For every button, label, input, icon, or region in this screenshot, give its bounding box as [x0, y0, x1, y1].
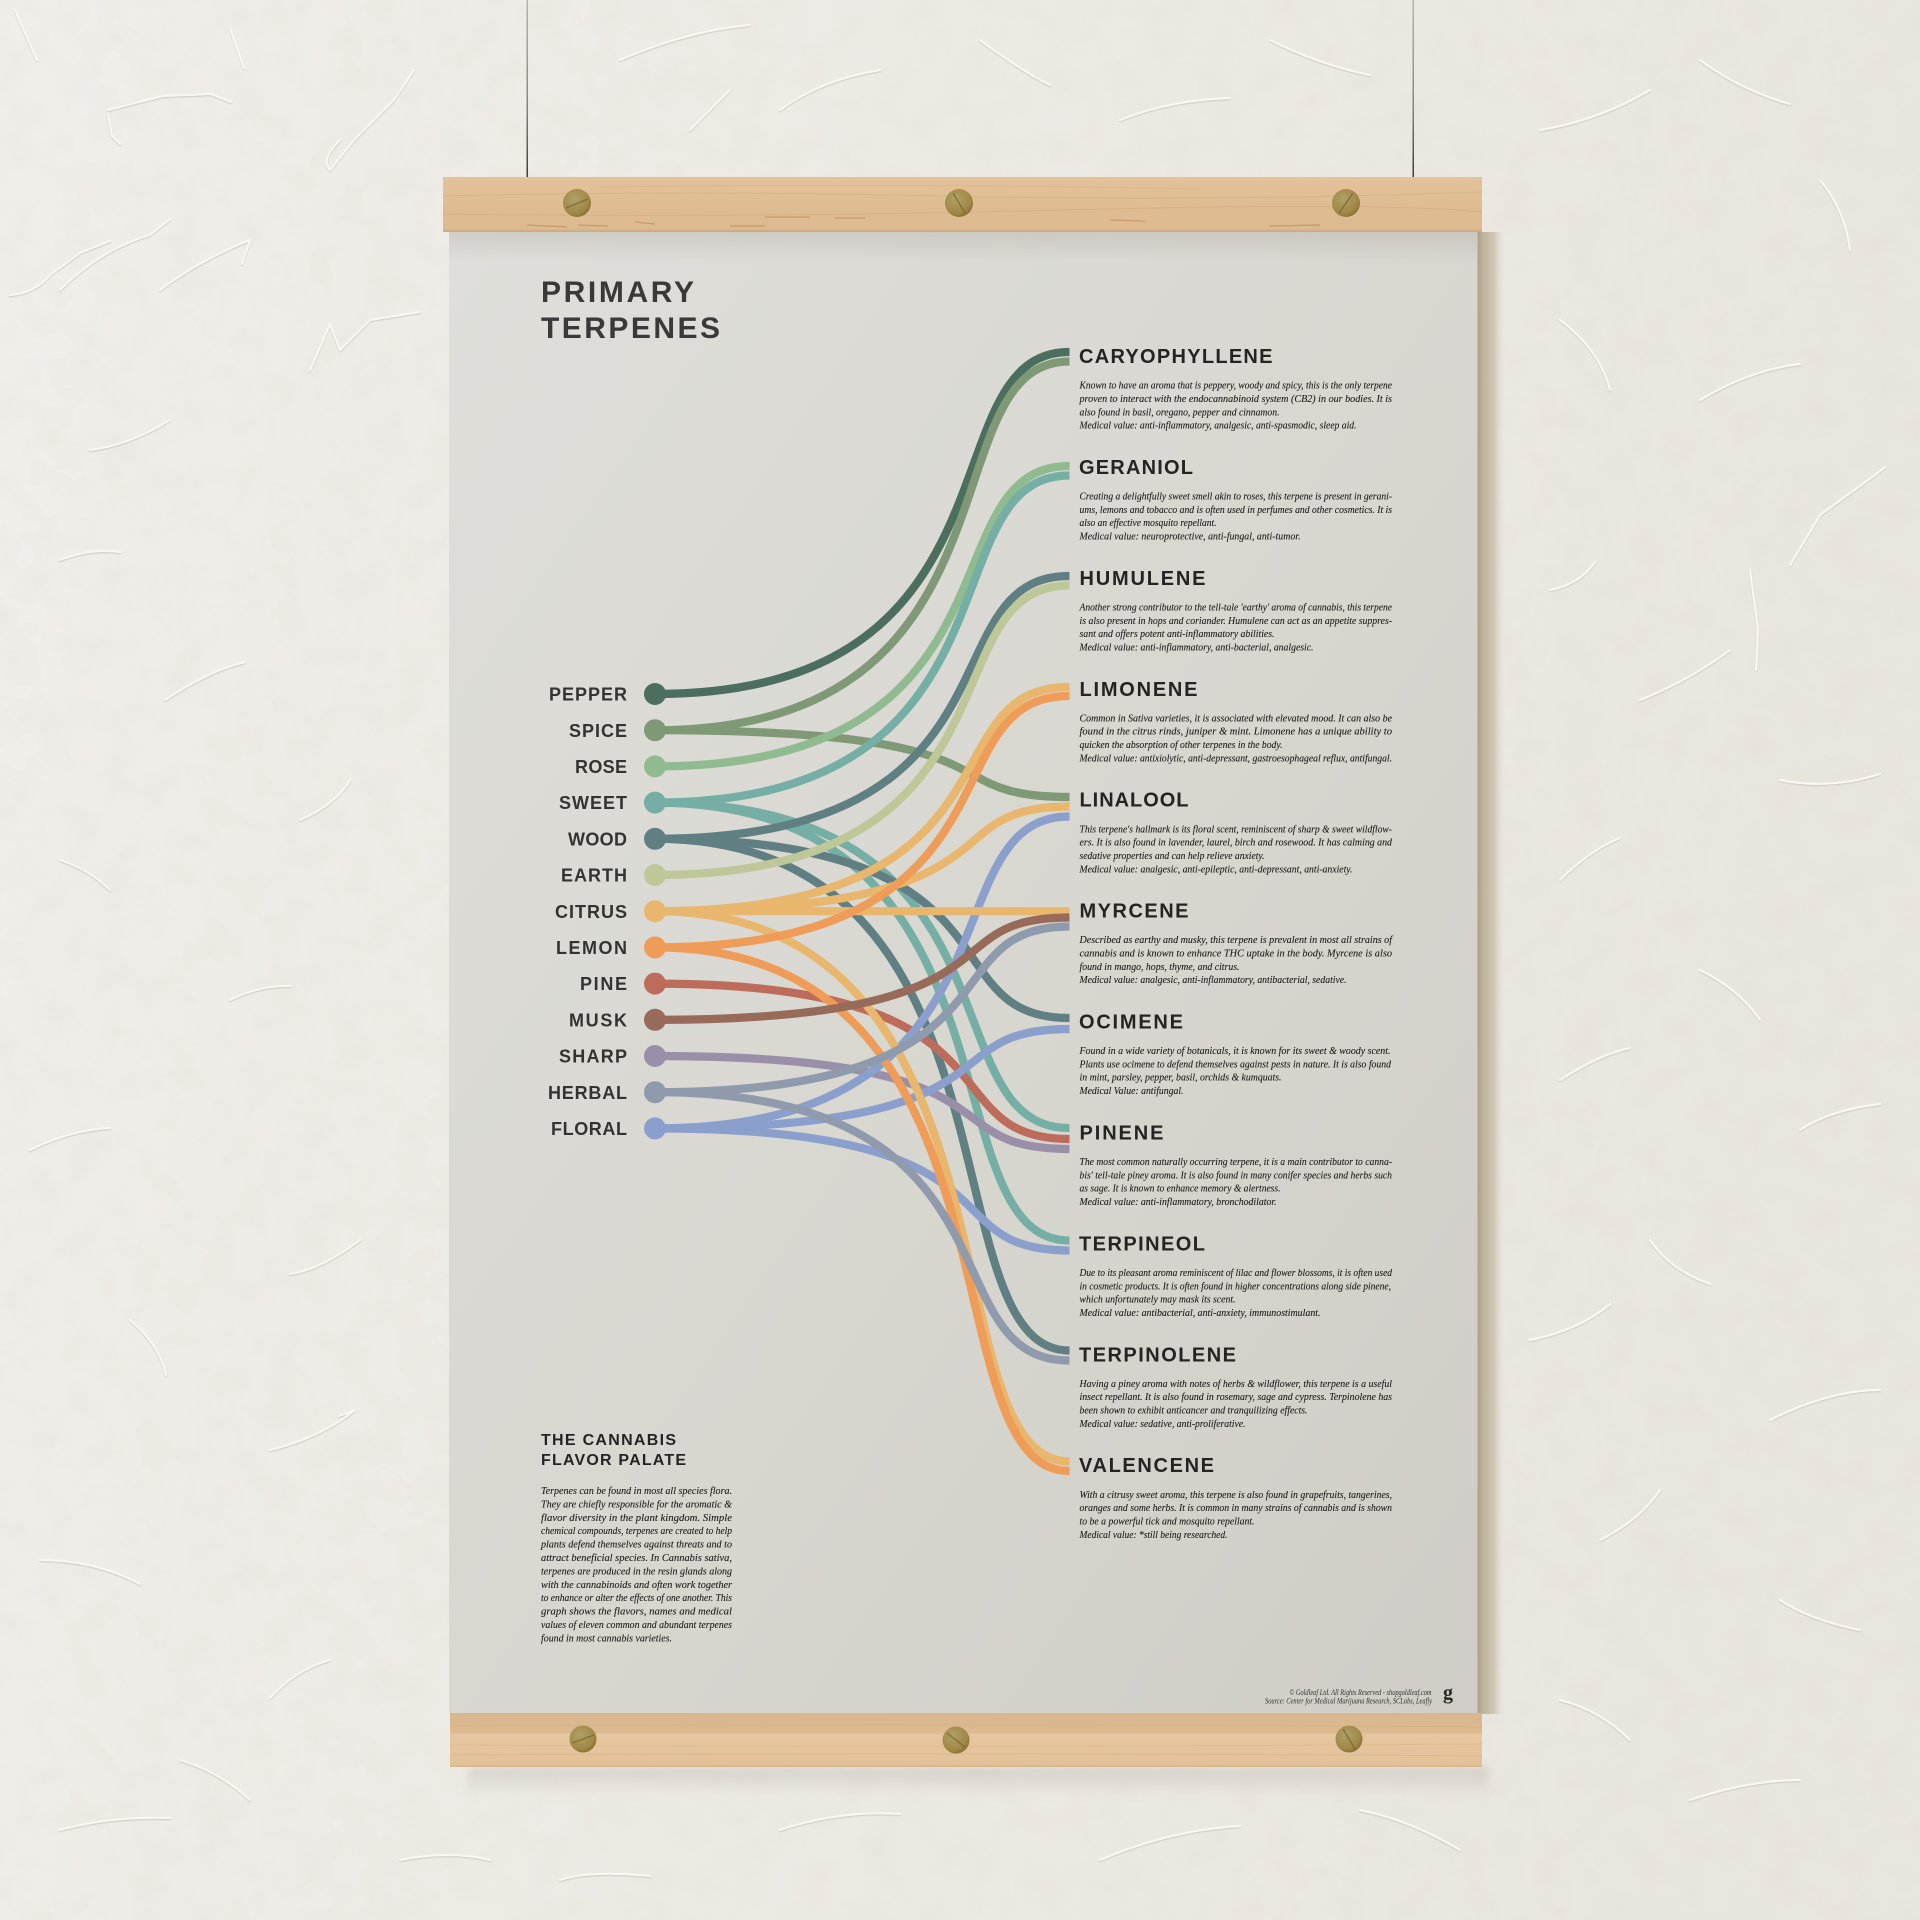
terpene: terpineol: Medical value: antibacterial, anti-anxiety, immunostimulant. [1079, 1307, 1320, 1319]
flavor: wood [568, 828, 666, 850]
terpene: pinene [1079, 1122, 1392, 1208]
terpene: caryophyllene [1079, 346, 1392, 432]
flavor: wood: WOOD [568, 830, 627, 850]
flavor: sharp: SHARP [559, 1046, 627, 1066]
flavor: spice [569, 719, 666, 741]
title: PRIMARY [541, 276, 694, 309]
logo: g: g [1443, 1682, 1453, 1704]
flavor: lemon: LEMON [556, 938, 627, 958]
flavor: spice: SPICE [569, 721, 627, 741]
terpene: valencene: VALENCENE [1079, 1455, 1214, 1477]
intro: the cannabis flavor palate: terpenes are produced in the resin glands along [541, 1565, 732, 1577]
terpene: linalool: sedative properties and can help relieve anxiety. [1080, 850, 1264, 862]
screws: top rail [563, 189, 1360, 217]
flavor: citrus: CITRUS [555, 902, 627, 922]
flow: citrus [655, 687, 1070, 1462]
terpene: terpineol: TERPINEOL [1079, 1234, 1205, 1256]
footer credits [1265, 1687, 1432, 1706]
terpene: caryophyllene: CARYOPHYLLENE [1079, 346, 1272, 368]
terpene: humulene: HUMULENE [1080, 568, 1206, 590]
shadow under bottom rail [468, 1767, 1488, 1797]
flow: pine [655, 984, 1070, 1139]
terpene: terpineol [1079, 1234, 1392, 1319]
terpene: pinene: PINENE [1080, 1122, 1164, 1144]
terpene: terpinolene: Having a piney aroma with notes of herbs & wildflower, this terpene is a useful [1079, 1378, 1392, 1390]
flavor: lemon [556, 936, 666, 958]
terpene: humulene: Another strong contributor to the tell-tale 'earthy' aroma of cannabis, this terpene [1079, 602, 1392, 614]
terpene: caryophyllene: proven to interact with the endocannabinoid system (CB2) in our bodies. It is [1079, 393, 1392, 405]
terpene: ocimene: Plants use ocimene to defend themselves against pests in nature. It is also found [1079, 1058, 1391, 1070]
terpene: valencene: Medical value: *still being researched. [1079, 1529, 1228, 1541]
terpene: limonene: LIMONENE [1080, 679, 1198, 701]
terpene: myrcene: MYRCENE [1080, 900, 1188, 922]
terpene: caryophyllene: Known to have an aroma that is peppery, woody and spicy, this is the only terpene [1079, 380, 1392, 392]
paper [449, 230, 1478, 1714]
terpene: pinene: as sage. It is known to enhance memory & alertness. [1080, 1183, 1280, 1195]
intro: the cannabis flavor palate: flavor diversity in the plant kingdom. Simple [541, 1512, 732, 1524]
flow chart: flavors to terpenes [655, 352, 1070, 1471]
flavor dots and labels [548, 683, 666, 1139]
terpene: humulene: sant and offers potent anti-inflammatory abilities. [1080, 628, 1274, 640]
flavor: rose [575, 755, 666, 777]
flow: sweet [655, 476, 1070, 1240]
terpene: geraniol [1079, 457, 1392, 543]
intro: the cannabis flavor palate: found in most cannabis varieties. [541, 1632, 672, 1644]
flow: spice [655, 362, 1070, 797]
footer credits: © Goldleaf Ltd. All Rights Reserved - shopgoldleaf.com [1290, 1687, 1432, 1697]
terpene: terpineol: in cosmetic products. It is often found in higher concentrations along side pinene, [1080, 1280, 1391, 1292]
terpene: limonene [1079, 679, 1392, 764]
terpene: ocimene: in mint, parsley, pepper, basil, orchids & kumquats. [1080, 1072, 1282, 1084]
shadow right of poster [1477, 232, 1505, 1714]
terpene: geraniol: Medical value: neuroprotective, anti-fungal, anti-tumor. [1079, 531, 1300, 543]
intro: the cannabis flavor palate: FLAVOR PALATE [541, 1452, 686, 1469]
terpene: terpineol: Due to its pleasant aroma reminiscent of lilac and flower blossoms, it is often used [1079, 1267, 1392, 1279]
flavor: musk [569, 1009, 666, 1031]
terpene: limonene: Common in Sativa varieties, it is associated with elevated mood. It can also be [1080, 712, 1392, 724]
terpene: caryophyllene: also found in basil, oregano, pepper and cinnamon. [1080, 406, 1280, 418]
terpene: geraniol: ums, lemons and tobacco and is often used in perfumes and other cosmetics. It is [1080, 504, 1392, 516]
terpene: valencene: to be a powerful tick and mosquito repellant. [1080, 1515, 1254, 1527]
terpene: terpinolene [1079, 1344, 1392, 1430]
intro: the cannabis flavor palate [540, 1432, 733, 1644]
intro: the cannabis flavor palate: graph shows the flavors, names and medical [541, 1606, 732, 1618]
flavor: herbal: HERBAL [548, 1083, 627, 1103]
flavor: pine: PINE [580, 974, 627, 994]
terpene: terpinolene: Medical value: sedative, anti-proliferative. [1079, 1418, 1246, 1430]
terpene: humulene [1079, 568, 1392, 654]
intro: the cannabis flavor palate: Terpenes can be found in most all species flora. [541, 1485, 732, 1497]
terpene: terpinolene: insect repellant. It is also found in rosemary, sage and cypress. Terpinolene has [1080, 1391, 1392, 1403]
flavor: herbal [548, 1081, 666, 1103]
terpene: humulene: is also present in hops and coriander. Humulene can act as an appetite suppres- [1080, 615, 1392, 627]
intro: the cannabis flavor palate: They are chiefly responsible for the aromatic & [541, 1498, 732, 1510]
terpene: myrcene: Medical value: analgesic, anti-inflammatory, antibacterial, sedative. [1079, 974, 1346, 986]
title: TERPENES [541, 312, 720, 345]
terpene: valencene: oranges and some herbs. It is common in many strains of cannabis and is shown [1080, 1502, 1392, 1514]
terpene: linalool: This terpene's hallmark is its floral scent, reminiscent of sharp & sweet wildflow- [1080, 823, 1392, 835]
intro: the cannabis flavor palate: to enhance or alter the effects of one another. This [541, 1592, 732, 1604]
terpene: humulene: Medical value: anti-inflammatory, anti-bacterial, analgesic. [1079, 642, 1314, 654]
flavor: sharp [559, 1045, 666, 1067]
flavor: floral: FLORAL [551, 1119, 627, 1139]
terpene: ocimene: OCIMENE [1079, 1012, 1183, 1034]
intro: the cannabis flavor palate: attract beneficial species. In Cannabis sativa, [541, 1552, 732, 1564]
flow: floral [655, 816, 1070, 1250]
terpene: ocimene: Found in a wide variety of botanicals, it is known for its sweet & woody scent. [1079, 1045, 1390, 1057]
flow: sharp [655, 1056, 1070, 1149]
screws: bottom rail [570, 1726, 1362, 1754]
bottom wood rail [450, 1713, 1482, 1767]
flavor: sweet [559, 792, 666, 814]
intro: the cannabis flavor palate: values of eleven common and abundant terpenes [541, 1619, 732, 1631]
terpene: linalool: Medical value: analgesic, anti-epileptic, anti-depressant, anti-anxiety. [1079, 863, 1352, 875]
flow: wood [655, 576, 1070, 1350]
flavor: citrus [555, 900, 666, 922]
flow: rose [655, 466, 1070, 766]
flavor: rose: ROSE [575, 757, 627, 777]
flavor: earth: EARTH [561, 866, 627, 886]
terpene: ocimene [1079, 1012, 1391, 1097]
flow: earth [655, 586, 1070, 875]
terpene: geraniol: also an effective mosquito repellant. [1080, 517, 1216, 529]
top wood rail [443, 177, 1482, 232]
intro: the cannabis flavor palate: THE CANNABIS [541, 1432, 676, 1449]
terpene: linalool: LINALOOL [1080, 790, 1188, 812]
terpene: linalool: ers. It is also found in lavender, laurel, birch and rosewood. It has calming and [1080, 837, 1392, 849]
terpene: terpinolene: TERPINOLENE [1079, 1344, 1236, 1366]
terpene: limonene: Medical value: antixiolytic, anti-depressant, gastroesophageal reflux, antifungal. [1079, 752, 1392, 764]
flow: herbal [655, 926, 1070, 1360]
terpene: myrcene: Described as earthy and musky, this terpene is prevalent in most all strains of [1079, 934, 1394, 946]
flavor: earth [561, 864, 666, 886]
terpene descriptions [1079, 346, 1394, 1541]
flavor: pepper: PEPPER [549, 684, 627, 704]
terpene: limonene: found in the citrus rinds, juniper & mint. Limonene has a unique ability to [1080, 726, 1392, 738]
terpene: pinene: Medical value: anti-inflammatory, bronchodilator. [1079, 1196, 1276, 1208]
terpene: valencene: With a citrusy sweet aroma, this terpene is also found in grapefruits, tangerines, [1080, 1489, 1392, 1501]
terpene: myrcene [1079, 900, 1394, 986]
terpene: ocimene: Medical Value: antifungal. [1079, 1085, 1184, 1097]
intro: the cannabis flavor palate: plants defend themselves against threats and to [540, 1539, 732, 1551]
intro: the cannabis flavor palate: with the cannabinoids and often work together [541, 1579, 733, 1591]
terpene: myrcene: found in mango, hops, thyme, and citrus. [1080, 961, 1240, 973]
terpene: linalool [1079, 790, 1392, 875]
terpene: geraniol: GERANIOL [1079, 457, 1193, 479]
flavor: pepper [549, 683, 666, 705]
flavor: sweet: SWEET [559, 793, 627, 813]
flow: musk [655, 918, 1070, 1020]
flavor: musk: MUSK [569, 1010, 627, 1030]
flavor: pine [580, 973, 666, 995]
intro: the cannabis flavor palate: chemical compounds, terpenes are created to help [541, 1525, 732, 1537]
terpene: pinene: The most common naturally occurring terpene, it is a main contributor to canna- [1080, 1156, 1392, 1168]
terpene: terpineol: which unfortunately may mask its scent. [1080, 1294, 1236, 1306]
shadow under top rail [449, 232, 1477, 262]
terpene: terpinolene: been shown to exhibit anticancer and tranquilizing effects. [1080, 1404, 1308, 1416]
terpene: myrcene: cannabis and is known to enhance THC uptake in the body. Myrcene is also [1080, 948, 1392, 960]
terpene: pinene: bis' tell-tale piney aroma. It is also found in many conifer species and herbs such [1080, 1169, 1392, 1181]
flavor: floral [551, 1117, 666, 1139]
terpene: limonene: quicken the absorption of other terpenes in the body. [1080, 739, 1282, 751]
terpene: caryophyllene: Medical value: anti-inflammatory, analgesic, anti-spasmodic, sleep aid. [1079, 420, 1356, 432]
terpene: valencene [1079, 1455, 1392, 1541]
flow: pepper [655, 352, 1070, 694]
footer credits: Source: Center for Medical Marijuana Research, SCLabs, Leafly [1265, 1696, 1432, 1706]
flow: lemon [655, 696, 1070, 1471]
title [541, 276, 720, 345]
wall seams [526, 0, 1414, 177]
terpene: geraniol: Creating a delightfully sweet smell akin to roses, this terpene is present in gerani- [1080, 491, 1392, 503]
